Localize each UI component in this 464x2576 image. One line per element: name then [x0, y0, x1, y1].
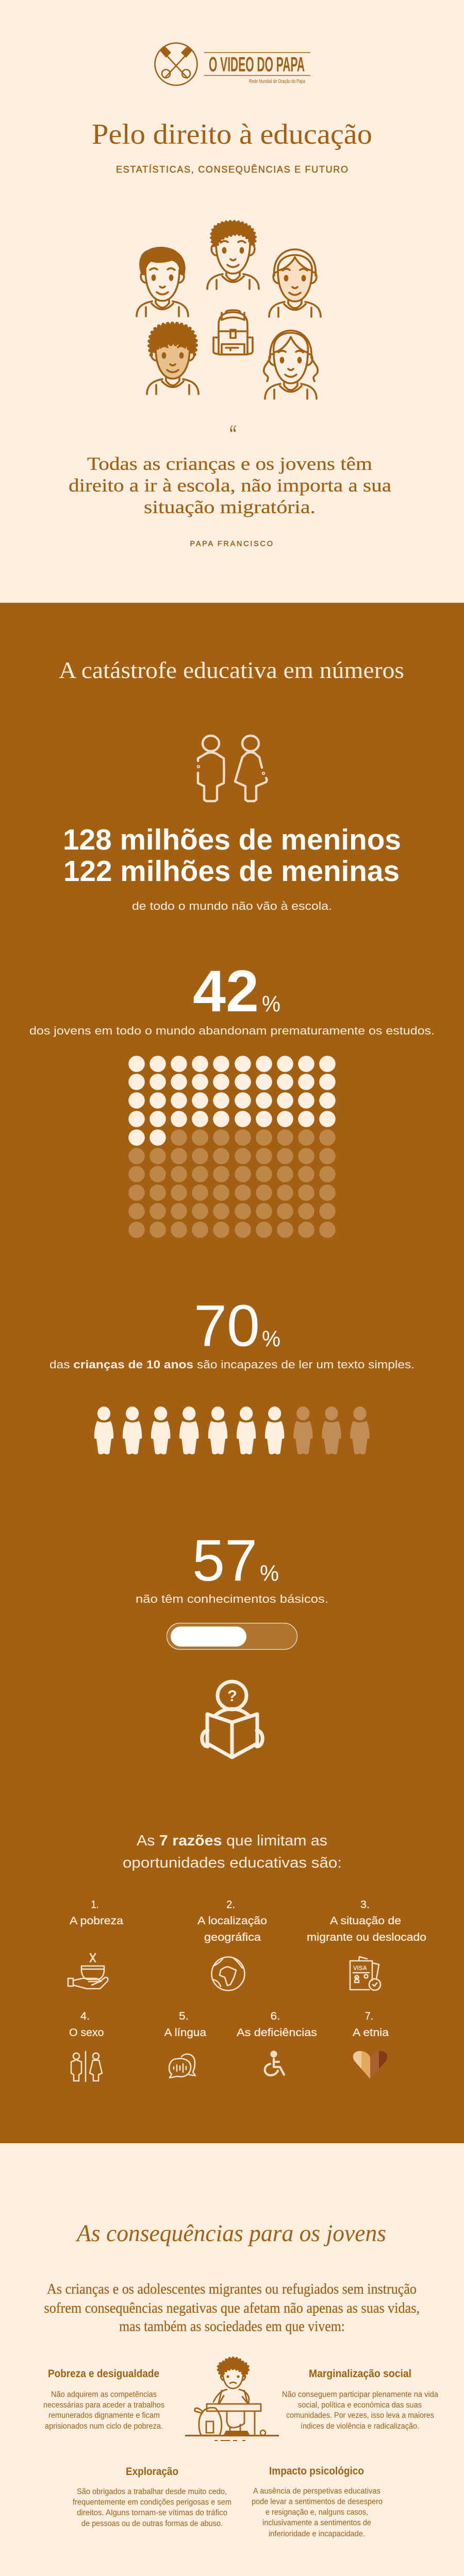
- text block: poverty and inequality: [43, 2368, 164, 2431]
- kid 2: [207, 221, 259, 289]
- text block: exploitation: São obrigados a trabalhar desde muito cedo,: [77, 2487, 227, 2496]
- heading: 7 reasons: [123, 1833, 342, 1871]
- icon: hand holding empty bowl: [68, 1954, 108, 1989]
- kid 5: [264, 331, 318, 399]
- text block: psychological impact: inclusivamente a sentimentos de: [262, 2518, 371, 2528]
- text block: social marginalisation: social, política e económica das suas: [298, 2401, 422, 2410]
- reason 4: sex: O sexo: [69, 2027, 104, 2039]
- heading: numbers: A catástrofe educativa em números: [59, 657, 404, 683]
- stat: 70%: 70: [194, 1293, 260, 1359]
- icon: sex: [71, 2052, 102, 2081]
- icon: reader with question mark: [202, 1682, 262, 1757]
- text block: social marginalisation: [282, 2368, 438, 2431]
- text block: exploitation: [73, 2466, 231, 2528]
- intro paragraph: consequences: As crianças e os adolescentes migrantes ou refugiados sem instrução: [47, 2281, 417, 2297]
- reason 3: migrant: A situação de: [330, 1915, 401, 1927]
- reason 2: location: [197, 1899, 267, 1943]
- text block: social marginalisation: comunidades. Por vezes, isso leva a maiores: [286, 2411, 434, 2420]
- text block: psychological impact: e resignação e, nalguns casos,: [266, 2508, 368, 2517]
- panel: numbers: [0, 603, 464, 2143]
- stat: 57%: %: [260, 1561, 279, 1586]
- stat: 42%: 42: [193, 959, 259, 1024]
- stat: 42%: %: [262, 991, 280, 1016]
- text block: psychological impact: [252, 2465, 383, 2538]
- text block: poverty and inequality: remunerados dignamente e ficam: [48, 2411, 160, 2420]
- text block: poverty and inequality: Não adquirem as competências: [51, 2391, 157, 2399]
- reason 5: language: 5.: [179, 2010, 189, 2022]
- intro paragraph: consequences: sofrem consequências negativas que afetam não apenas as suas vidas,: [44, 2300, 420, 2316]
- heading: 7 reasons: As 7 razões que limitam as: [137, 1833, 327, 1849]
- text block: psychological impact: Impacto psicológico: [269, 2465, 364, 2477]
- text block: exploitation: de pessoas ou de outras formas de abuso.: [81, 2519, 223, 2528]
- kid 1: [137, 247, 188, 316]
- logo: O Video do Papa: O VIDEO DO PAPA: [209, 54, 305, 76]
- progress bar 57%: [167, 1623, 297, 1650]
- caption: 42%: dos jovens em todo o mundo abandonam prematuramente os estudos.: [29, 1024, 435, 1037]
- intro paragraph: consequences: [44, 2281, 420, 2335]
- quote: Todas as crianças: direito a ir à escola, não importa a sua: [69, 475, 391, 496]
- reason 5: language: [164, 2010, 206, 2039]
- caption: not in school: de todo o mundo não vão à escola.: [132, 900, 332, 912]
- illustration: children and backpack: [137, 221, 321, 399]
- text block: psychological impact: inferioridade e incapacidade.: [269, 2530, 365, 2538]
- reason 1: poverty: [70, 1899, 123, 1927]
- reason 2: location: geográfica: [204, 1931, 261, 1943]
- backpack: [213, 310, 253, 354]
- heading: consequences: As consequências para os jovens: [75, 2220, 386, 2247]
- panel: header: [0, 0, 464, 603]
- text block: exploitation: frequentemente em condições perigosas e sem: [73, 2498, 231, 2507]
- text block: poverty and inequality: Pobreza e desigualdade: [48, 2368, 159, 2380]
- panel: consequences: [0, 2143, 464, 2576]
- stat: boys and girls out of school: 122 milhões de meninas: [63, 855, 400, 888]
- kid 3: [269, 249, 321, 317]
- text block: social marginalisation: índices de violência e radicalização.: [301, 2422, 419, 2431]
- stat: 57%: 57: [192, 1528, 257, 1594]
- reason 2: location: 2.: [226, 1899, 235, 1910]
- chart: dot grid 42 of 100: [128, 1056, 336, 1238]
- icon: reader with question mark: ?: [227, 1687, 237, 1705]
- opening quote mark: “: [229, 420, 237, 449]
- icon: globe: [211, 1957, 244, 1991]
- reason 7: ethnicity: 7.: [365, 2010, 373, 2022]
- quote: Todas as crianças: situação migratória.: [144, 497, 316, 517]
- reason 7: ethnicity: [353, 2010, 389, 2039]
- text block: poverty and inequality: aprisionados num ciclo de pobreza.: [45, 2422, 163, 2431]
- reason 4: sex: 4.: [80, 2010, 90, 2022]
- reason 7: ethnicity: A etnia: [353, 2027, 389, 2039]
- reason 1: poverty: 1.: [91, 1899, 99, 1910]
- icon: visa document: [350, 1957, 380, 1990]
- text block: social marginalisation: Não conseguem participar plenamente na vida: [282, 2391, 438, 2399]
- illustration: child at school desk: [185, 2358, 279, 2441]
- reason 6: disabilities: [237, 2010, 317, 2039]
- quote: Todas as crianças: [69, 453, 391, 517]
- stat: 70%: %: [262, 1326, 280, 1351]
- text block: psychological impact: A ausência de perspetivas educativas: [253, 2487, 380, 2496]
- logo: O Video do Papa: Rede Mundial de Oração do Papa: [249, 79, 305, 84]
- reason 3: migrant: migrante ou deslocado: [307, 1931, 426, 1943]
- reason 4: sex: [69, 2010, 104, 2039]
- text block: poverty and inequality: necessárias para aceder a trabalhos: [43, 2401, 164, 2410]
- reason 1: poverty: A pobreza: [70, 1915, 123, 1927]
- caption: 70%: das crianças de 10 anos são incapazes de ler um texto simples.: [49, 1358, 415, 1371]
- title: Pelo direito à educação: [92, 118, 372, 150]
- reason 3: migrant: [307, 1899, 426, 1943]
- logo: O Video do Papa: [155, 43, 310, 86]
- stat: boys and girls out of school: [63, 823, 401, 888]
- text block: psychological impact: pode levar a sentimentos de desespero: [252, 2498, 383, 2506]
- intro paragraph: consequences: mas também as sociedades em que vivem:: [119, 2318, 345, 2335]
- reason 6: disabilities: As deficiências: [237, 2027, 317, 2039]
- heading: 7 reasons: oportunidades educativas são:: [123, 1855, 342, 1871]
- icon: boy and girl: [198, 736, 267, 801]
- text block: exploitation: Exploração: [126, 2466, 178, 2478]
- reason 3: migrant: 3.: [360, 1899, 370, 1910]
- icon: visa document: VISA: [353, 1965, 367, 1972]
- reason 6: disabilities: 6.: [270, 2010, 280, 2022]
- stat: boys and girls out of school: 128 milhões de meninos: [63, 823, 401, 856]
- reason 2: location: A localização: [197, 1915, 267, 1927]
- reason 5: language: A língua: [164, 2027, 206, 2039]
- chart: 7 of 10 people: [94, 1406, 370, 1454]
- caption: 57%: não têm conhecimentos básicos.: [136, 1592, 328, 1605]
- text block: social marginalisation: Marginalização social: [309, 2368, 411, 2380]
- icon: heart with skin tones: [353, 2051, 388, 2079]
- subtitle: ESTATÍSTICAS, CONSEQUÊNCIAS E FUTURO: [116, 164, 348, 175]
- text block: exploitation: direitos. Alguns tornam-se vítimas do tráfico: [77, 2509, 227, 2517]
- quote author: PAPA FRANCISCO: [190, 540, 273, 548]
- quote: Todas as crianças: Todas as crianças e os jovens têm: [87, 453, 372, 474]
- icon: speech bubbles: [169, 2054, 195, 2078]
- kid 4: [147, 324, 198, 394]
- icon: wheelchair: [265, 2052, 284, 2075]
